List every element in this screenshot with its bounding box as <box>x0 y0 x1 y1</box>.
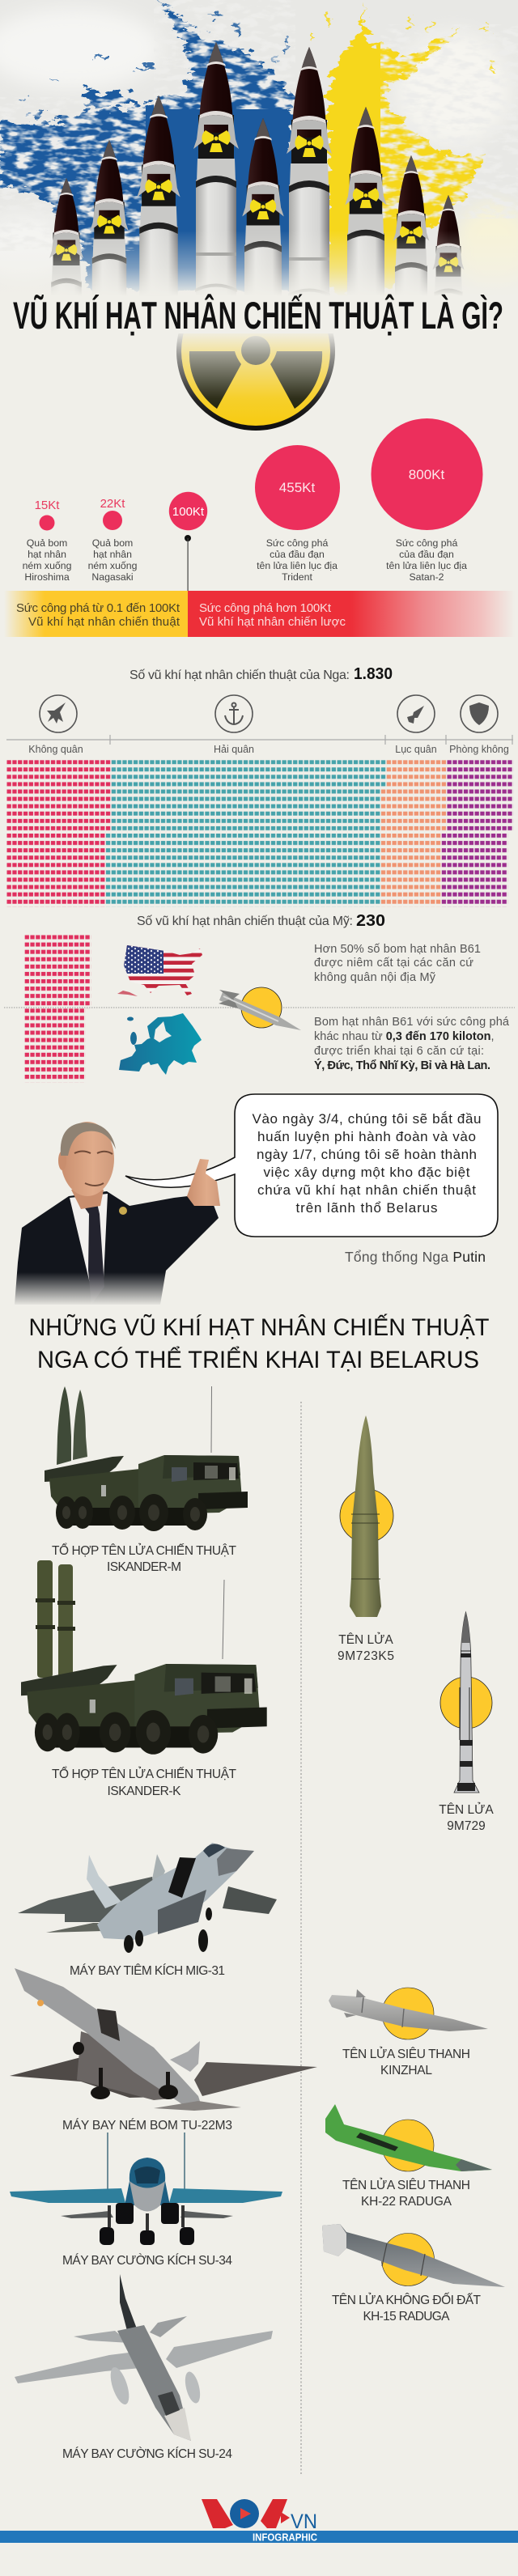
label: 9M729 <box>439 1802 494 1833</box>
label: Iskander-K <box>52 1767 237 1798</box>
bubble: 800Kt Satan-2: tên lửa liên lục địa <box>386 560 467 571</box>
heading: weapons <box>29 1313 489 1373</box>
heading: weapons: NHỮNG VŨ KHÍ HẠT NHÂN CHIẾN THUẬT <box>29 1313 489 1341</box>
radiation emblem <box>176 333 335 431</box>
speech bubble quote: việc xây dựng một kho đặc biệt <box>264 1165 470 1180</box>
label: Kh-15 <box>332 2293 482 2323</box>
heading: US count: Số vũ khí hạt nhân chiến thuật của Mỹ: <box>137 915 353 928</box>
label: Iskander-K: TỔ HỢP TÊN LỬA CHIẾN THUẬT <box>52 1767 237 1781</box>
branch scale: Lục quân <box>395 744 437 755</box>
waffle: 230 US weapons <box>25 936 91 1082</box>
bubble: 800Kt Satan-2: Satan-2 <box>409 571 444 583</box>
label: Su-24: MÁY BAY CƯỜNG KÍCH SU-24 <box>62 2447 232 2461</box>
band: tactical vs strategic <box>4 591 515 637</box>
bubble: 15Kt Hiroshima <box>23 499 72 583</box>
caption: Putin: Tổng thống Nga Putin <box>345 1249 486 1265</box>
icon: rocket <box>397 695 435 732</box>
label: 9M723K5 <box>338 1632 394 1663</box>
heading: Russia count: Số vũ khí hạt nhân chiến thuật của Nga: <box>130 668 350 682</box>
bubble: 22Kt Nagasaki <box>88 497 138 583</box>
label: 9M729: TÊN LỬA <box>439 1802 494 1817</box>
label: Su-34: MÁY BAY CƯỜNG KÍCH SU-34 <box>62 2254 232 2268</box>
vehicle: Iskander-K <box>21 1560 267 1755</box>
bubble: 455Kt Trident: Sức công phá <box>266 537 328 549</box>
text: B61 US: được niêm cất tại các căn cứ <box>314 957 473 970</box>
missiles <box>49 42 465 295</box>
icon: shield <box>461 695 498 732</box>
bubble: 15Kt Hiroshima: Quả bom <box>27 537 67 549</box>
bubble: 15Kt Hiroshima: 15Kt <box>35 499 60 512</box>
icon: US map flag <box>117 945 204 997</box>
label: Kh-15: KH-15 RADUGA <box>363 2310 450 2323</box>
text: B61 US <box>314 943 481 984</box>
label: Kinzhal <box>342 2047 470 2077</box>
bubble: 455Kt Trident <box>255 445 340 583</box>
label: Kh-22: KH-22 RADUGA <box>361 2195 452 2209</box>
band: tactical vs strategic: Sức công phá hơn 100Kt <box>199 601 332 615</box>
branch scale: Phòng không <box>449 744 509 755</box>
bubble: 15Kt Hiroshima: Hiroshima <box>24 571 70 583</box>
label: Kh-15: TÊN LỬA KHÔNG ĐỐI ĐẤT <box>332 2293 482 2307</box>
label: Iskander-M: TỔ HỢP TÊN LỬA CHIẾN THUẬT <box>52 1543 237 1558</box>
label: Tu-22M3: MÁY BAY NÉM BOM TU-22M3 <box>62 2119 232 2133</box>
bubble: 22Kt Nagasaki: 22Kt <box>100 497 125 511</box>
text: B61 Europe: Bom hạt nhân B61 với sức công phá <box>314 1016 510 1029</box>
missile: 9M723K5 <box>340 1415 393 1617</box>
paint speckle <box>0 0 518 251</box>
aircraft: Su-34 <box>10 2133 282 2245</box>
label: MiG-31: MÁY BAY TIÊM KÍCH MIG-31 <box>70 1964 225 1978</box>
band: tactical vs strategic: Vũ khí hạt nhân chiến thuật <box>28 615 180 629</box>
label: 9M723K5: TÊN LỬA <box>338 1632 393 1647</box>
yield comparison bubbles <box>23 418 482 637</box>
bubble: 22Kt Nagasaki: Nagasaki <box>91 571 134 583</box>
label: Iskander-K: ISKANDER-K <box>107 1785 181 1798</box>
bubble: 15Kt Hiroshima: ném xuống <box>23 560 72 571</box>
bubble: 22Kt Nagasaki: Quả bom <box>92 537 133 549</box>
logo: VOV.VN infographic <box>0 2499 518 2543</box>
text: B61 Europe <box>314 1016 510 1072</box>
aircraft: MiG-31 <box>18 1843 277 1953</box>
speech bubble quote: trên lãnh thổ Belarus <box>296 1200 437 1216</box>
icon: B61 bomb <box>219 987 301 1030</box>
blue splash <box>0 2 298 291</box>
bubble: 15Kt Hiroshima: hạt nhân <box>28 549 66 560</box>
heading: weapons: NGA CÓ THỂ TRIỂN KHAI TẠI BELARUS <box>37 1346 479 1373</box>
bubble: 800Kt Satan-2 <box>371 418 482 583</box>
branch scale <box>6 695 513 755</box>
bubble: 100Kt threshold: 100Kt <box>172 505 205 519</box>
label: Kinzhal: TÊN LỬA SIÊU THANH <box>342 2047 470 2061</box>
yellow splash <box>312 2 496 291</box>
bubble: 22Kt Nagasaki: hạt nhân <box>93 549 132 560</box>
bubble: 800Kt Satan-2: của đầu đạn <box>399 549 454 560</box>
label: Kinzhal: KINZHAL <box>380 2064 432 2077</box>
icon: jet <box>40 695 77 732</box>
branch scale: Không quân <box>28 744 83 755</box>
speech bubble quote <box>125 1094 498 1237</box>
missile: Kh-15 <box>322 2224 505 2287</box>
label: 9M723K5: 9M723K5 <box>338 1649 394 1663</box>
missile: 9M729 <box>440 1612 492 1793</box>
portrait: Putin <box>0 1122 220 1306</box>
hero: missiles with blue and yellow paint splash <box>0 0 518 295</box>
bubble: 22Kt Nagasaki: ném xuống <box>88 560 138 571</box>
text: B61 Europe: khác nhau từ 0,3 đến 170 kiloton, <box>314 1030 494 1043</box>
speech bubble quote: Vào ngày 3/4, chúng tôi sẽ bắt đầu <box>253 1111 481 1127</box>
logo: VOV.VN infographic: INFOGRAPHIC <box>253 2531 317 2543</box>
band: tactical vs strategic: Vũ khí hạt nhân chiến lược <box>199 615 346 629</box>
missile: Kh-22 <box>325 2104 492 2171</box>
bubble: 800Kt Satan-2: 800Kt <box>409 467 444 482</box>
text: B61 US: không quân nội địa Mỹ <box>314 971 436 984</box>
missile: Kinzhal <box>329 1988 488 2039</box>
number: 230: 230 <box>356 912 385 930</box>
icon: anchor <box>215 695 253 732</box>
speech bubble quote: chứa vũ khí hạt nhân chiến thuật <box>257 1182 476 1198</box>
bubble: 455Kt Trident: tên lửa liên lục địa <box>257 560 338 571</box>
text: B61 US: Hơn 50% số bom hạt nhân B61 <box>314 943 481 956</box>
text: B61 Europe: được triển khai tại 6 căn cứ tại: <box>314 1045 484 1058</box>
vehicle: Iskander-M <box>45 1386 248 1531</box>
waffle: 1830 Russian weapons <box>6 760 513 907</box>
speech bubble quote: ngày 1/7, chúng tôi sẽ hoàn thành <box>257 1147 477 1162</box>
aircraft: Su-24 <box>15 2274 273 2441</box>
band: tactical vs strategic: Sức công phá từ 0.1 đến 100Kt <box>16 601 180 615</box>
bubble: 100Kt threshold <box>169 492 207 637</box>
label: Iskander-M <box>52 1543 237 1574</box>
label: Kh-22: TÊN LỬA SIÊU THANH <box>342 2178 470 2192</box>
bubble: 455Kt Trident: của đầu đạn <box>270 549 325 560</box>
number: 1.830: 1.830 <box>354 665 393 683</box>
bubble: 455Kt Trident: 455Kt <box>279 480 315 495</box>
label: Kh-22 <box>342 2178 470 2209</box>
divider vertical <box>300 1402 302 2475</box>
bubble: 455Kt Trident: Trident <box>282 571 312 583</box>
label: Iskander-M: ISKANDER-M <box>107 1560 181 1574</box>
speech bubble quote: huấn luyện phi hành đoàn và vào <box>257 1129 476 1144</box>
icon: Europe map <box>119 1013 202 1075</box>
aircraft: Tu-22M3 <box>10 1968 317 2111</box>
label: 9M729: 9M729 <box>447 1819 486 1833</box>
bubble: 800Kt Satan-2: Sức công phá <box>396 537 457 549</box>
branch scale: Hải quân <box>214 744 254 755</box>
logo: VOV.VN infographic: VN <box>291 2510 317 2533</box>
text: B61 Europe: Ý, Đức, Thổ Nhĩ Kỳ, Bỉ và Hà Lan. <box>314 1058 490 1072</box>
divider <box>4 1007 515 1008</box>
